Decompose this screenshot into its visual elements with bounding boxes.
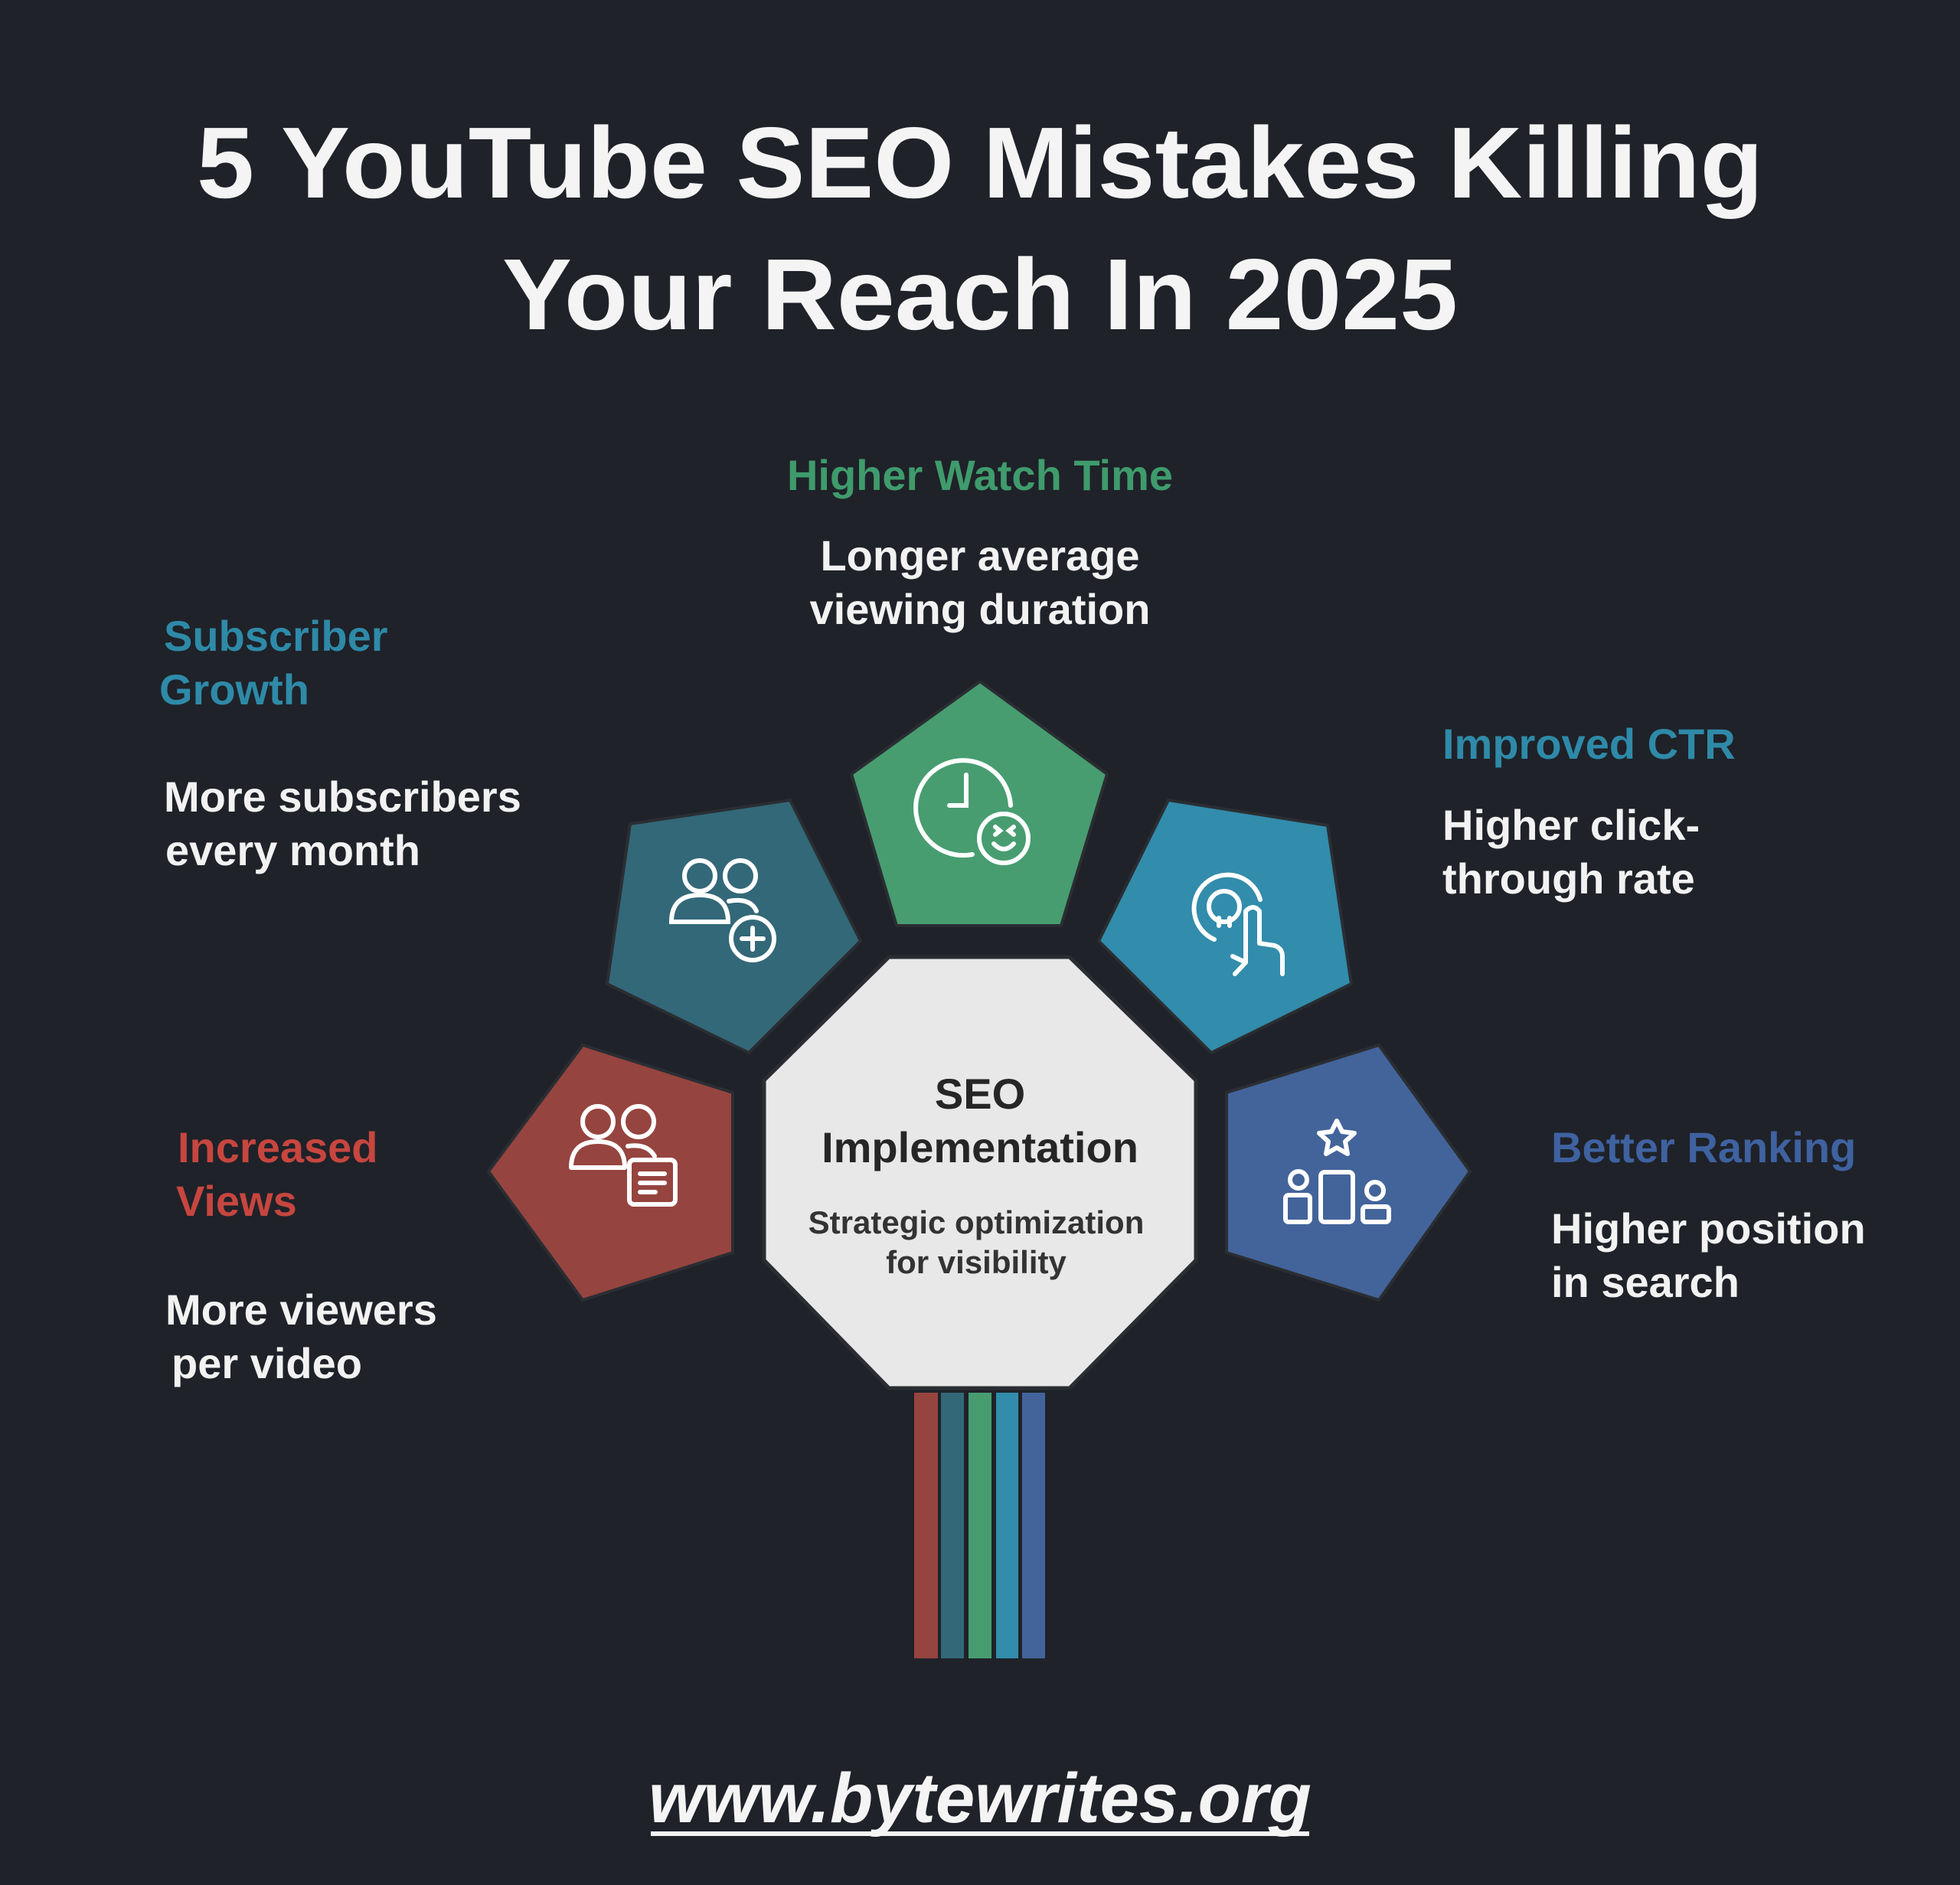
icon: clock with face (916, 760, 1028, 863)
label: improved ctr: Improved CTR (1442, 720, 1736, 768)
label: increased views: per video (172, 1339, 362, 1387)
label: better ranking: Higher position (1551, 1204, 1866, 1253)
pentagon: improved ctr (1099, 800, 1351, 1053)
label: subscriber growth: Subscriber (164, 612, 388, 660)
octagon: seo implementation: SEO (935, 1070, 1025, 1118)
pentagon: better ranking (1227, 1045, 1470, 1300)
label: better ranking: in search (1551, 1258, 1740, 1306)
label: improved ctr: through rate (1442, 854, 1695, 903)
label: subscriber growth: Growth (159, 665, 309, 714)
label: increased views: More viewers (165, 1286, 437, 1334)
footer url: www.bytewrites.org (648, 1759, 1312, 1838)
label: higher watch time: Higher Watch Time (787, 451, 1173, 499)
label: increased views: Views (176, 1177, 297, 1225)
label: improved ctr: Higher click- (1442, 801, 1700, 849)
label: improved ctr (1442, 720, 1736, 903)
label: higher watch time (787, 451, 1173, 633)
octagon: seo implementation: for visibility (886, 1244, 1067, 1280)
octagon: seo implementation (764, 957, 1196, 1388)
icon: users plus (671, 861, 774, 960)
pentagon: watch time (851, 681, 1107, 926)
pentagon: increased views (488, 1045, 733, 1300)
title (197, 106, 1763, 351)
title: Your Reach In 2025 (502, 238, 1458, 351)
label: subscriber growth (159, 612, 521, 874)
pentagon: subscriber growth (607, 800, 861, 1053)
label: higher watch time: viewing duration (810, 585, 1150, 633)
stem bars (914, 1393, 1045, 1658)
octagon: seo implementation: Implementation (822, 1123, 1138, 1171)
label: better ranking (1551, 1123, 1866, 1306)
label: higher watch time: Longer average (820, 531, 1140, 580)
label: increased views (165, 1123, 437, 1387)
title: 5 YouTube SEO Mistakes Killing (197, 106, 1763, 219)
label: subscriber growth: More subscribers (164, 773, 521, 821)
label: subscriber growth: every month (165, 826, 420, 874)
icon: podium with star (1285, 1121, 1389, 1222)
icon: click pointer (1194, 875, 1282, 974)
icon: users with doc (571, 1106, 675, 1204)
octagon: seo implementation: Strategic optimization (808, 1204, 1144, 1240)
label: better ranking: Better Ranking (1551, 1123, 1856, 1171)
label: increased views: Increased (178, 1123, 378, 1171)
